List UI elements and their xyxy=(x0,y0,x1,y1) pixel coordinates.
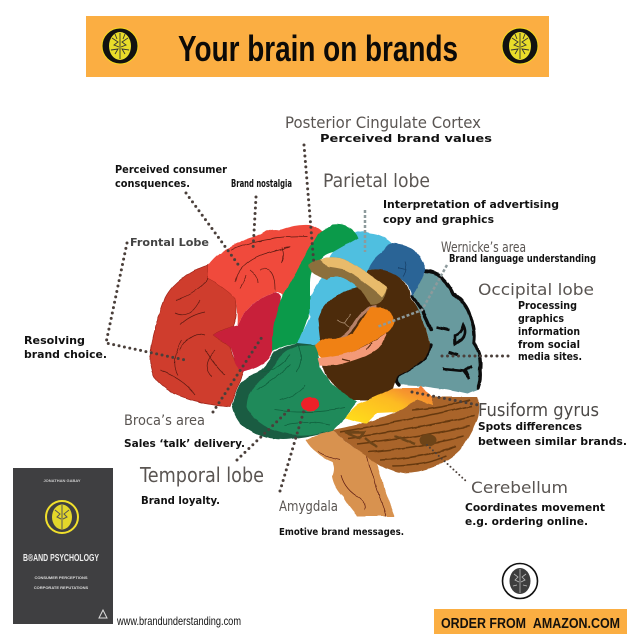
book cover xyxy=(13,468,113,624)
pointer lines xyxy=(106,145,512,491)
book cover: JONATHAN GABAY xyxy=(43,478,81,483)
label: consumer consequences: consquences. xyxy=(115,177,190,190)
salmon region xyxy=(318,333,387,366)
occipital black outline xyxy=(396,271,480,388)
label: occipital: Processing xyxy=(518,299,577,312)
label: frontal: Frontal Lobe xyxy=(130,236,209,249)
label: cerebellum: Coordinates movement xyxy=(465,501,605,514)
icon: brain left xyxy=(102,28,138,64)
label: resolving: brand choice. xyxy=(24,348,107,361)
parietal blue xyxy=(368,243,425,297)
fusiform gyrus xyxy=(345,385,432,423)
label: temporal xyxy=(139,463,264,507)
label: parietal: Parietal lobe xyxy=(323,170,430,192)
label: broca: Sales ‘talk’ delivery. xyxy=(124,437,245,450)
label: consumer consequences: Perceived consumer xyxy=(115,163,228,176)
temporal green xyxy=(247,345,357,435)
label: cerebellum: Cerebellum xyxy=(471,478,568,497)
label: fusiform: between similar brands. xyxy=(478,435,627,448)
premotor light red xyxy=(208,225,322,326)
label: amygdala xyxy=(279,499,404,538)
label: broca xyxy=(124,413,245,450)
label: temporal: Brand loyalty. xyxy=(141,494,220,507)
orange region xyxy=(315,307,395,359)
cerebellum xyxy=(332,397,479,473)
label: occipital: Occipital lobe xyxy=(478,280,594,299)
tan strip xyxy=(308,257,387,305)
label: occipital: media sites. xyxy=(518,350,582,363)
amygdala xyxy=(300,397,320,411)
frontal dark red xyxy=(150,265,243,407)
occipital lobe xyxy=(396,272,481,394)
title: Your brain on brands xyxy=(178,28,458,69)
label: parietal: Interpretation of advertising xyxy=(383,198,559,211)
label: broca: Broca’s area xyxy=(124,413,205,429)
label: fusiform xyxy=(478,400,627,448)
label: consumer consequences xyxy=(115,163,228,190)
central brown xyxy=(318,269,430,400)
label: posterior cingulate: Posterior Cingulate Cortex xyxy=(285,113,481,132)
label: nostalgia: Brand nostalgia xyxy=(231,177,292,190)
book cover: CONSUMER PERCEPTIONS xyxy=(34,575,88,580)
label: occipital: from social xyxy=(518,338,580,351)
label: amygdala: Emotive brand messages. xyxy=(279,527,404,538)
brain stem xyxy=(305,430,395,516)
icon: brain bottom xyxy=(502,564,538,598)
label: wernicke: Wernicke’s area xyxy=(441,240,526,256)
label: parietal xyxy=(323,170,559,226)
label: amygdala: Amygdala xyxy=(279,499,338,515)
label: cerebellum: e.g. ordering online. xyxy=(465,515,588,528)
label: cerebellum xyxy=(465,478,605,528)
green top xyxy=(272,224,358,352)
label: occipital: information xyxy=(518,325,580,338)
parietal light blue xyxy=(295,231,392,346)
label: parietal: copy and graphics xyxy=(383,213,494,226)
icon: brain right xyxy=(502,28,538,64)
book cover: CORPORATE REPUTATIONS xyxy=(34,585,89,590)
label: wernicke xyxy=(441,240,596,265)
label: resolving: Resolving xyxy=(24,334,85,347)
label: resolving xyxy=(24,334,107,361)
label: fusiform: Spots differences xyxy=(478,420,582,433)
brain illustration xyxy=(150,224,481,516)
Broca crimson xyxy=(213,292,281,372)
label: fusiform: Fusiform gyrus xyxy=(478,400,599,421)
label: posterior cingulate: Perceived brand values xyxy=(320,132,493,145)
temporal dark xyxy=(232,343,357,440)
label: temporal: Temporal lobe xyxy=(139,463,264,487)
label: posterior cingulate xyxy=(285,113,493,145)
label: wernicke: Brand language understanding xyxy=(449,252,596,265)
label: occipital: graphics xyxy=(518,312,564,325)
book cover: B®AND PSYCHOLOGY xyxy=(23,552,99,564)
label: occipital xyxy=(478,280,594,363)
order button xyxy=(434,609,627,634)
website: www.brandunderstanding.com xyxy=(116,614,241,628)
header banner xyxy=(86,16,549,77)
